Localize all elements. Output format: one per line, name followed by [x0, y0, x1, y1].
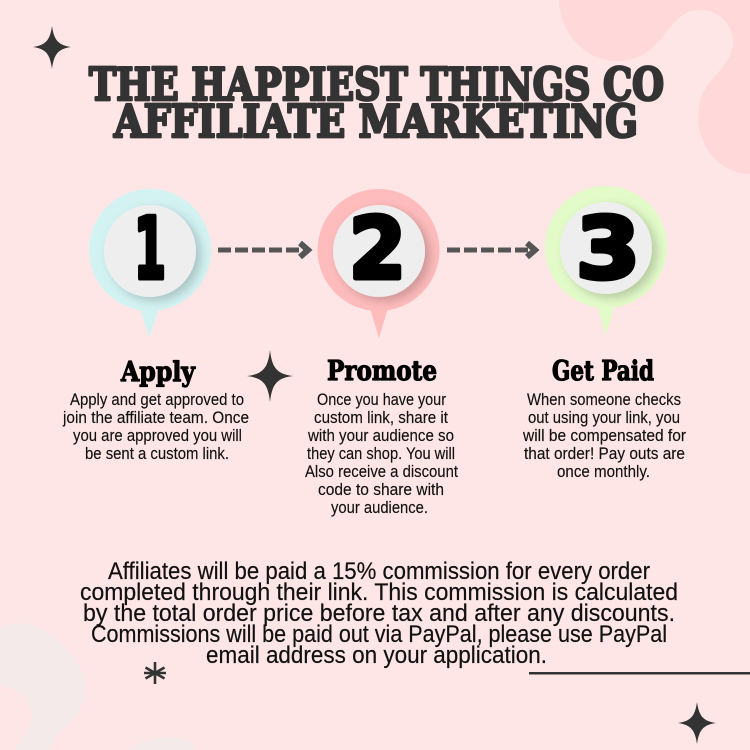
column: promote: they can shop. You will [307, 445, 455, 463]
column: get paid: that order! Pay outs are [524, 445, 685, 463]
column: apply: Apply [120, 357, 196, 388]
column: promote: code to share with [318, 481, 444, 499]
commission paragraph: email address on your application. [206, 642, 547, 669]
column: get paid: will be compensated for [522, 427, 686, 445]
step 2 pin: 2 [349, 200, 406, 299]
step 3 pin: 3 [576, 200, 640, 299]
commission paragraph: Commissions will be paid out via PayPal, please use PayPal [91, 621, 667, 648]
column: get paid: When someone checks [527, 391, 681, 409]
icon: asterisk [144, 662, 166, 684]
divider line [529, 672, 750, 674]
title: AFFILIATE MARKETING [113, 95, 638, 148]
arrow 2 to 3 [447, 243, 535, 257]
blob: top right decoration [559, 0, 750, 174]
column: get paid: out using your link, you [528, 409, 680, 427]
column: promote: Promote [327, 356, 437, 387]
commission paragraph [80, 558, 678, 669]
column: promote: Also receive a discount [305, 463, 458, 481]
step 1 pin [89, 189, 211, 338]
commission paragraph: by the total order price before tax and after any discounts. [83, 600, 675, 627]
column: promote: with your audience so [307, 427, 454, 445]
column: apply: Apply and get approved to [70, 391, 244, 409]
arrow 1 to 2 [218, 243, 308, 257]
step 3 pin [545, 186, 667, 335]
column: apply: you are approved you will [73, 427, 242, 445]
column: promote [305, 356, 458, 517]
title [89, 58, 664, 148]
column: get paid: Get Paid [552, 356, 654, 387]
icon: star bottom right [678, 702, 716, 744]
column: promote: Once you have your [317, 391, 446, 409]
commission paragraph: Affiliates will be paid a 15% commission for every order [108, 558, 650, 585]
step 1 pin: 1 [134, 200, 166, 299]
column: promote: your audience. [331, 499, 428, 517]
blob: bottom left decoration [0, 623, 197, 750]
column: get paid: once monthly. [557, 463, 650, 481]
column: get paid [522, 356, 686, 481]
commission paragraph: completed through their link. This commission is calculated [80, 579, 678, 606]
column: promote: custom link, share it [314, 409, 448, 427]
step 2 pin [318, 189, 440, 338]
column: apply [62, 357, 249, 463]
icon: star middle [247, 350, 293, 402]
column: apply: join the affiliate team. Once [62, 409, 249, 427]
column: apply: be sent a custom link. [85, 445, 229, 463]
icon: star top left [33, 26, 71, 69]
